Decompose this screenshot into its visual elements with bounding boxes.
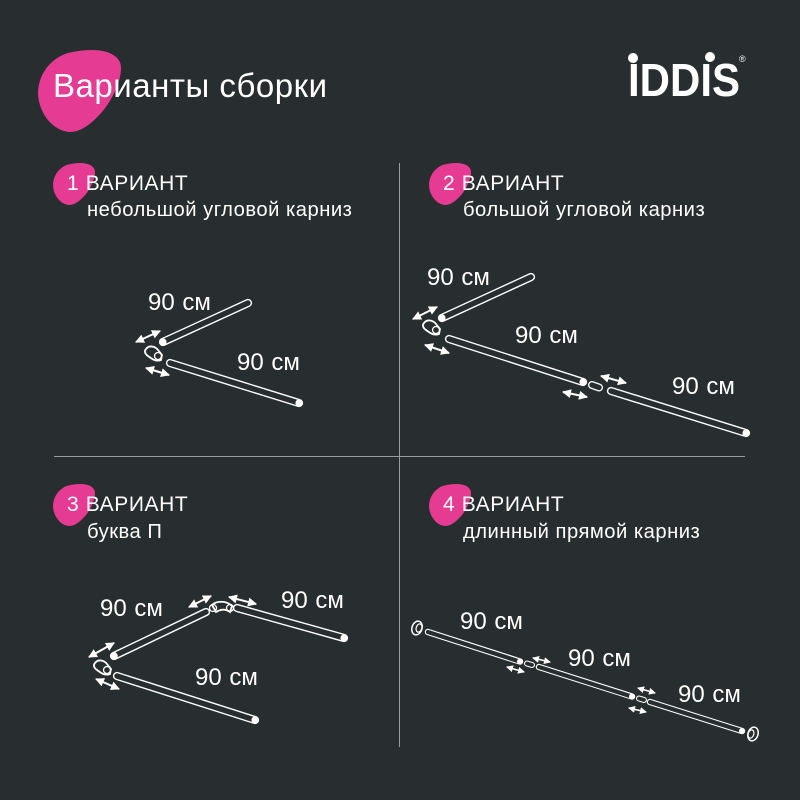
arrow: right coupler, upper (638, 688, 655, 693)
tube: lower 90 cm (170, 363, 303, 407)
label: right 90 cm: 90 см (672, 373, 735, 400)
heading: variant 1: небольшой угловой карниз (87, 199, 352, 221)
icon: left wall flange (410, 620, 424, 636)
arrow: middle tube left (425, 345, 449, 353)
arrow: lower tube (146, 368, 169, 375)
arrow: upper right tube (229, 597, 256, 604)
logo: IDDIS: ® (739, 54, 746, 64)
arrow: right tube (601, 376, 626, 383)
icon: corner connector (145, 346, 162, 361)
icon: right wall flange (746, 726, 760, 742)
label: middle 90 cm: 90 см (568, 645, 631, 672)
arrow: lower tube (96, 679, 119, 689)
arrow: middle tube right (563, 392, 587, 397)
icon: corner connector (94, 660, 111, 675)
tube: right 90 cm (611, 391, 750, 437)
arrow: right coupler, lower (629, 708, 646, 712)
label: right 90 cm: 90 см (678, 681, 741, 708)
tube: upper right 90 cm (237, 608, 348, 642)
heading: variant 1 (53, 163, 352, 221)
panel: variant 3 (53, 484, 348, 724)
heading: variant 4: 4 ВАРИАНТ (443, 493, 564, 516)
label: upper left 90 cm: 90 см (100, 595, 163, 622)
label: upper right 90 cm: 90 см (281, 587, 344, 614)
icon: left coupler (527, 664, 532, 665)
panel: variant 2 (413, 163, 750, 437)
tube: left 90 cm (428, 632, 523, 664)
panel: variant 1 (53, 163, 352, 407)
tube: upper 90 cm (159, 303, 248, 346)
tube: upper left 90 cm (110, 612, 206, 660)
heading: variant 3: 3 ВАРИАНТ (67, 493, 188, 516)
heading: variant 4: длинный прямой карниз (463, 521, 700, 543)
arrow: upper tube (413, 307, 437, 319)
heading: variant 3: буква П (87, 521, 162, 543)
icon: straight coupler (592, 385, 599, 388)
heading: variant 3 (53, 484, 188, 543)
label: lower 90 cm: 90 см (237, 349, 300, 376)
heading: variant 4 (429, 484, 700, 543)
arrow: upper tube (136, 331, 160, 342)
label: upper 90 cm: 90 см (427, 264, 490, 291)
arrow: left coupler, upper (533, 658, 550, 662)
arrow: upper left tube, elbow end (189, 596, 211, 607)
heading: variant 2: 2 ВАРИАНТ (443, 172, 564, 195)
panel: variant 4 (410, 484, 760, 742)
tube: lower 90 cm (117, 676, 259, 724)
arrow: left coupler, lower (507, 667, 524, 672)
logo: IDDIS: IDDIS (628, 54, 740, 106)
heading: variant 1: 1 ВАРИАНТ (67, 172, 188, 195)
tube: right 90 cm (650, 702, 745, 734)
arrow: upper left tube, corner end (89, 643, 114, 657)
label: middle 90 cm: 90 см (515, 322, 578, 349)
tube: middle 90 cm (539, 667, 635, 700)
heading: variant 2: большой угловой карниз (463, 199, 705, 221)
tube: upper 90 cm (438, 277, 531, 322)
label: lower 90 cm: 90 см (195, 664, 258, 691)
heading: variant 2 (429, 163, 705, 221)
tube: middle 90 cm (449, 339, 587, 386)
icon: elbow connector (210, 602, 234, 612)
heading: title with pink blob: Варианты сборки (53, 67, 327, 104)
label: left 90 cm: 90 см (460, 608, 523, 635)
icon: corner connector (423, 320, 440, 335)
icon: right coupler (639, 698, 644, 700)
heading: title with pink blob (38, 50, 327, 132)
label: upper 90 cm: 90 см (148, 289, 211, 316)
